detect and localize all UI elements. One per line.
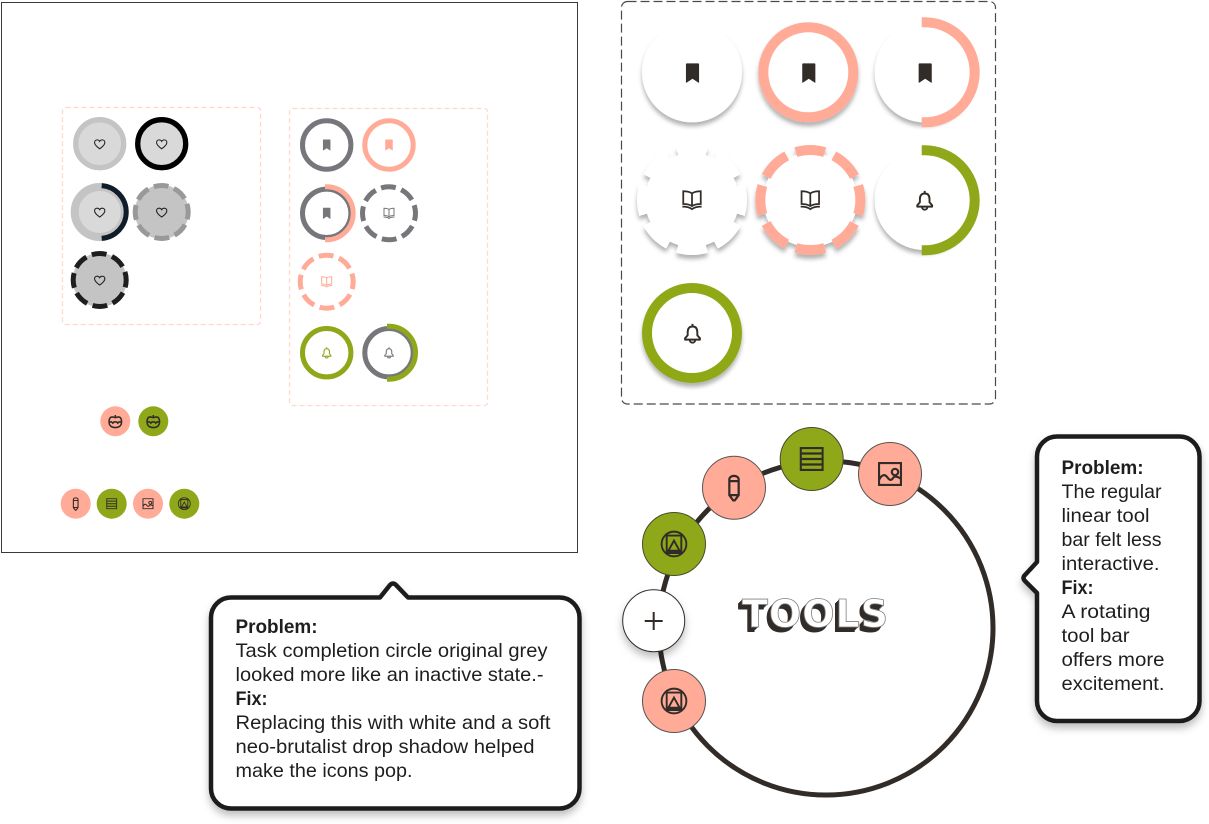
callout: tool bar problem and fix: bar felt less	[1062, 529, 1162, 551]
bell half progress	[875, 150, 975, 250]
callout: tool bar problem and fix: The regular	[1062, 481, 1162, 503]
tool button: mountain salmon	[642, 670, 706, 732]
bookmark salmon ring	[763, 27, 853, 117]
tool button: list	[780, 428, 843, 490]
book circle dashed grey	[362, 187, 416, 240]
bookmark circle grey	[302, 121, 351, 169]
callout: task completion problem and fix: Replacing this with white and a soft	[236, 712, 551, 734]
callout: tool bar problem and fix: Fix:	[1062, 577, 1094, 599]
tool button: mountain green	[642, 512, 706, 576]
heart circle half progress	[75, 186, 126, 238]
bell circle half progress	[365, 326, 416, 379]
bookmark half progress	[875, 22, 975, 122]
callout: tool bar problem and fix	[1024, 436, 1200, 721]
callout: tool bar problem and fix: Problem:	[1062, 457, 1144, 479]
rotating tool wheel	[623, 428, 993, 795]
heart circle dashed dark	[73, 253, 127, 307]
heart circle dashed grey	[135, 185, 189, 239]
small tool buttons row	[61, 489, 199, 519]
heart circle complete	[138, 120, 186, 168]
book circle dashed salmon	[300, 255, 353, 308]
callout: task completion problem and fix: neo-brutalist drop shadow helped	[236, 736, 534, 758]
callout: task completion problem and fix: Problem:	[236, 616, 318, 638]
bookmark circle salmon	[365, 121, 413, 169]
callout: task completion problem and fix: looked more like an inactive state.-	[236, 664, 544, 686]
bell green ring	[647, 288, 737, 378]
tool button: add	[623, 590, 685, 652]
bell circle green	[302, 328, 351, 377]
heart circle default	[76, 120, 124, 168]
book white dashed circle	[642, 150, 742, 250]
bookmark circle half progress	[302, 187, 353, 240]
bookmark white circle	[642, 22, 742, 122]
tool button: pen	[702, 456, 766, 519]
callout: task completion problem and fix: make the icons pop.	[236, 760, 412, 782]
callout: tool bar problem and fix: tool bar	[1062, 625, 1130, 647]
panel: revised white task circles	[622, 2, 996, 404]
tool button: image	[858, 442, 922, 506]
callout: tool bar problem and fix: offers more	[1062, 649, 1164, 671]
callout: tool bar problem and fix: interactive.	[1062, 553, 1160, 575]
callout: task completion problem and fix	[211, 584, 580, 808]
panel: original icon states frame	[2, 2, 578, 552]
heading: TOOLS wheel label: TOOLS	[742, 592, 889, 636]
group: outline task circles	[290, 108, 488, 406]
callout: task completion problem and fix: Task completion circle original grey	[236, 640, 548, 662]
group: grey heart task circles	[62, 108, 260, 324]
callout: tool bar problem and fix: excitement.	[1062, 673, 1164, 695]
callout: task completion problem and fix: Fix:	[236, 688, 268, 710]
small tomato buttons	[100, 406, 168, 436]
book salmon dashed ring	[760, 150, 860, 250]
callout: tool bar problem and fix: A rotating	[1062, 601, 1150, 623]
callout: tool bar problem and fix: linear tool	[1062, 505, 1150, 527]
